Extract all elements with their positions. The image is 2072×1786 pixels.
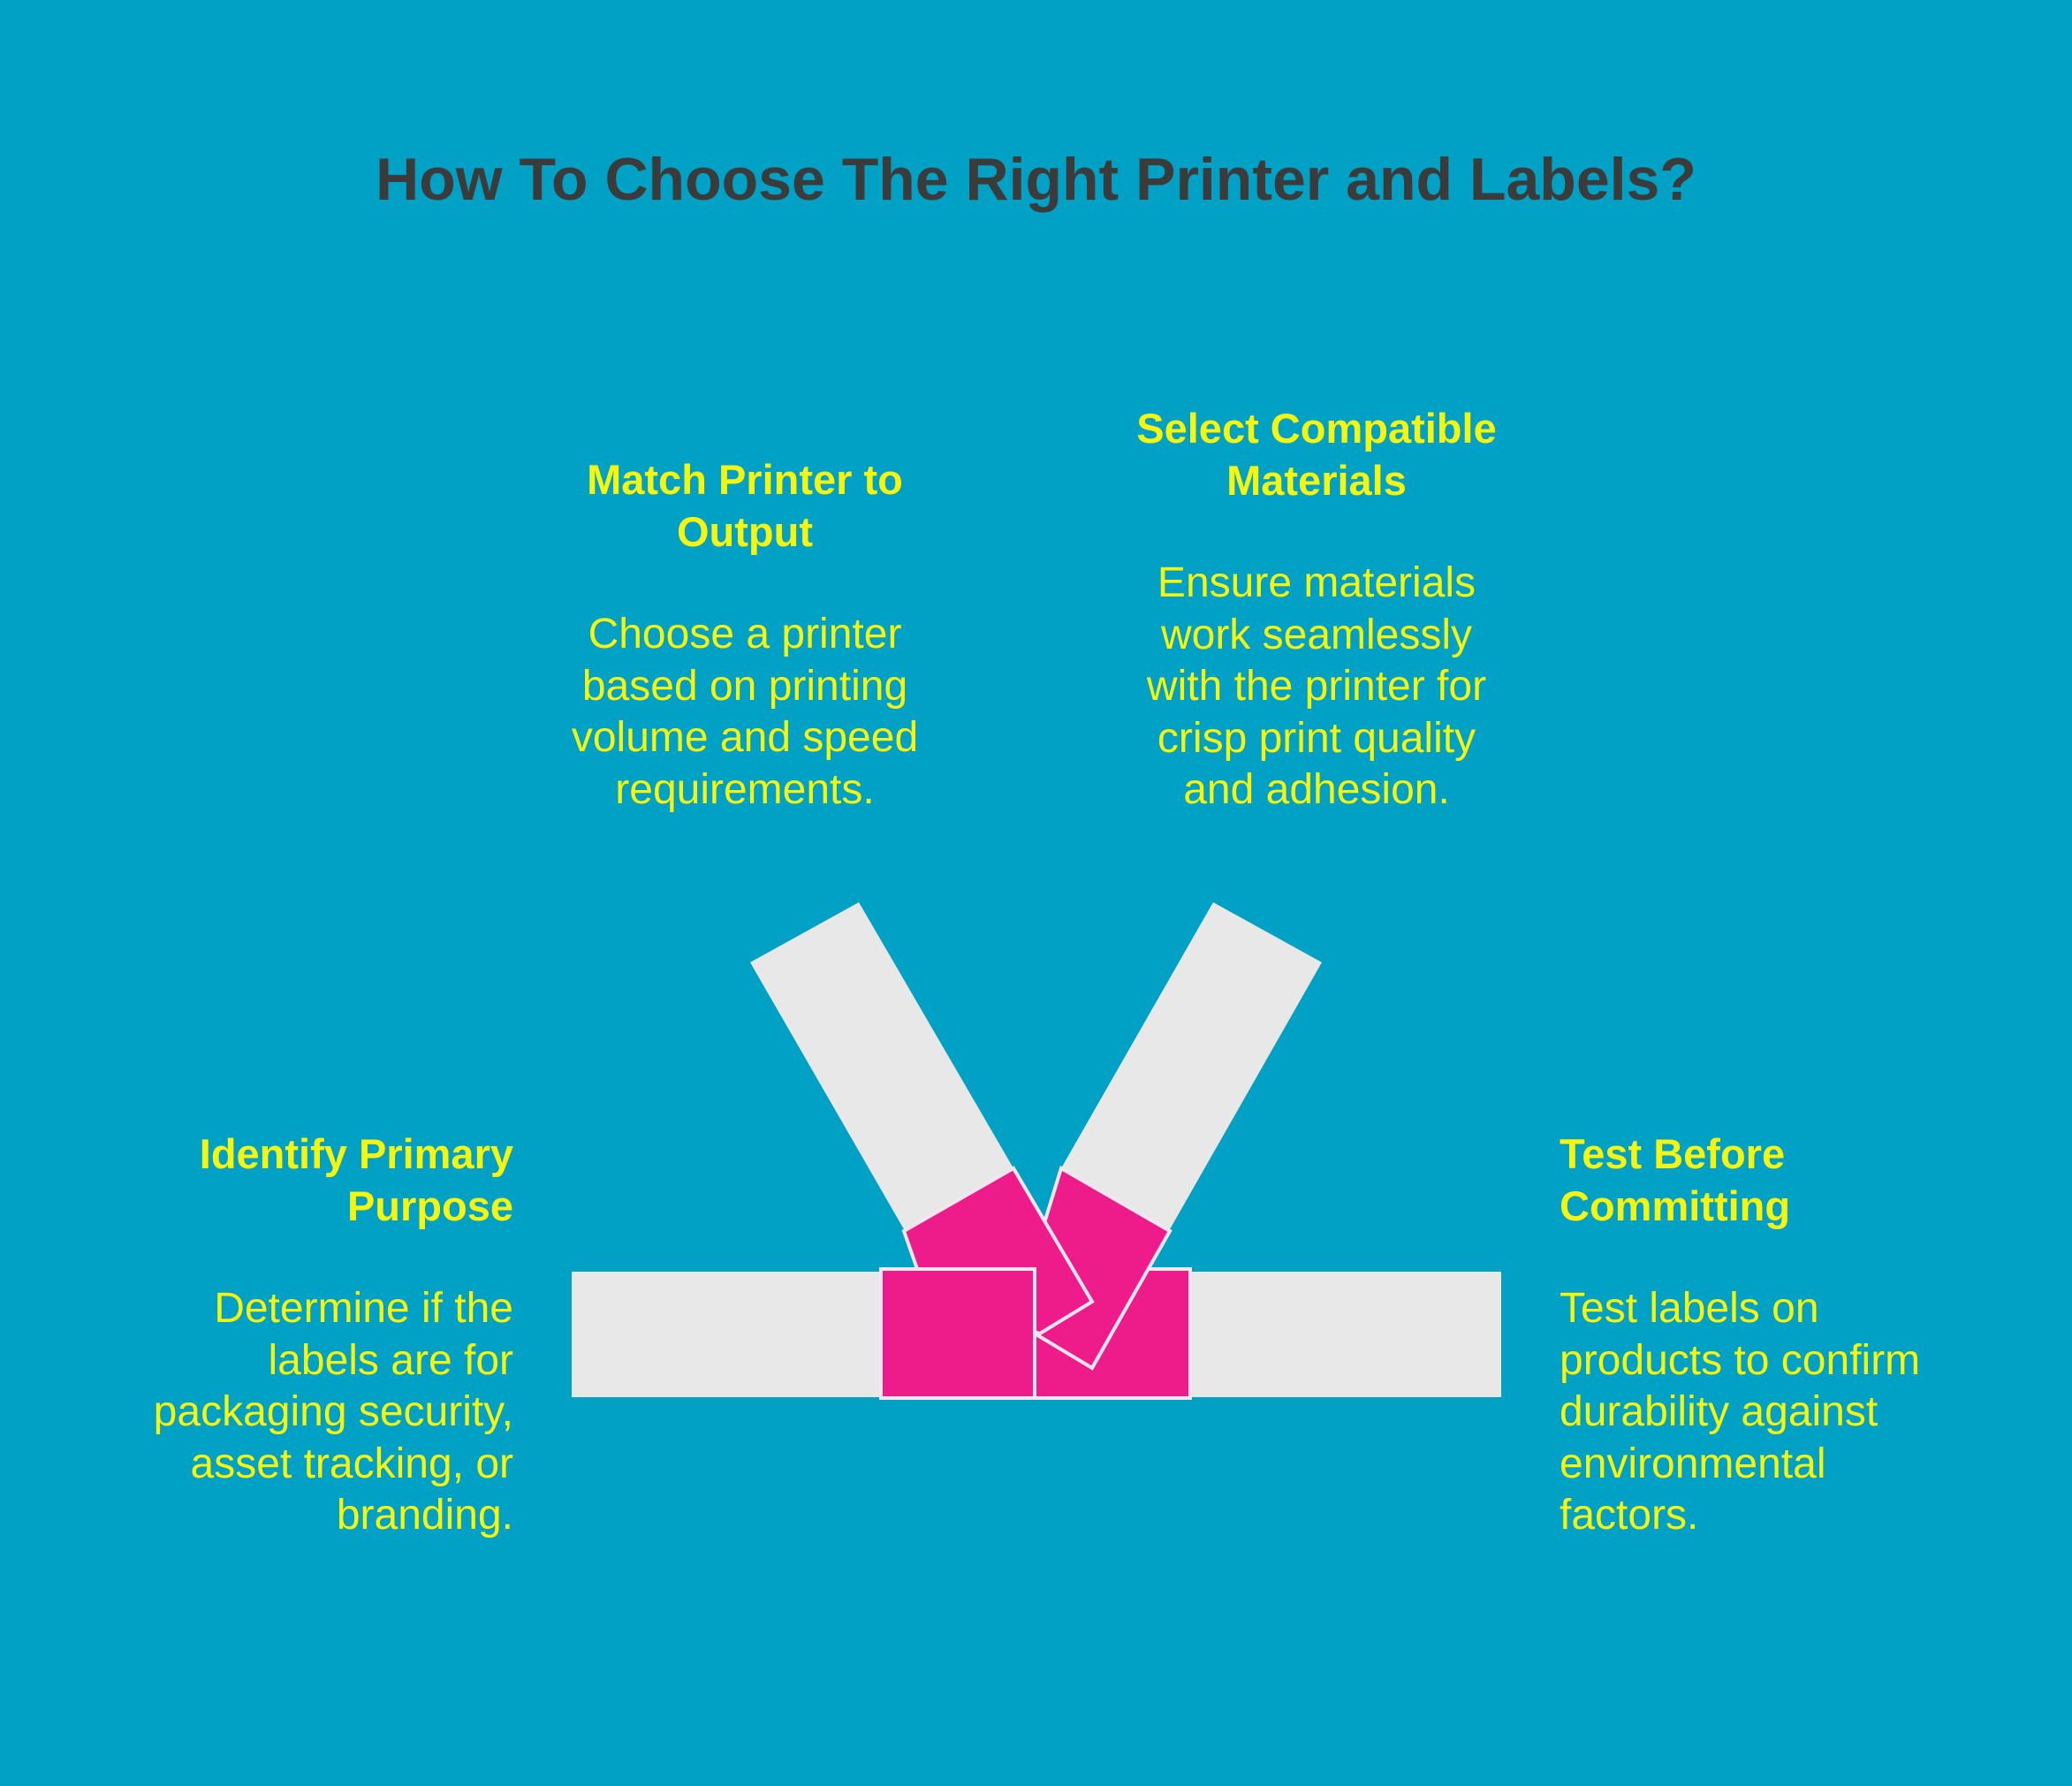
text block: match printer: Match Printer to (587, 456, 903, 503)
left pink diagonal (904, 1168, 1092, 1334)
text block: test before: Test labels on (1560, 1285, 1819, 1332)
text block: identify purpose: asset tracking, or (191, 1440, 513, 1486)
left bar (572, 1272, 881, 1397)
text block: match printer (572, 456, 918, 813)
text block: test before (1560, 1130, 1920, 1539)
right bar (1190, 1272, 1501, 1397)
text block: identify purpose: branding. (337, 1492, 513, 1539)
text block: select materials: Ensure materials (1157, 559, 1476, 606)
right pink diagonal (1035, 1168, 1170, 1368)
text block: select materials: crisp print quality (1157, 714, 1476, 762)
text block: select materials: and adhesion. (1183, 766, 1450, 813)
text block: identify purpose: Determine if the (214, 1285, 513, 1332)
text block: match printer: requirements. (615, 765, 875, 813)
text block: test before: factors. (1560, 1492, 1698, 1539)
text block: identify purpose (154, 1130, 513, 1539)
text block: identify purpose: Identify Primary (200, 1130, 513, 1177)
left diagonal bar (750, 902, 1013, 1229)
text block: match printer: Choose a printer (588, 611, 901, 657)
text block: match printer: Output (677, 507, 813, 555)
text block: select materials (1136, 405, 1497, 813)
text block: select materials: Select Compatible (1136, 405, 1497, 452)
text block: identify purpose: labels are for (269, 1336, 513, 1384)
right diagonal bar (1061, 902, 1322, 1229)
text block: test before: environmental (1560, 1440, 1825, 1486)
title: How To Choose The Right Printer and Labels? (376, 146, 1696, 213)
text block: match printer: based on printing (582, 663, 907, 709)
text block: test before: products to confirm (1560, 1336, 1920, 1384)
text block: select materials: Materials (1226, 456, 1407, 504)
text block: test before: durability against (1560, 1388, 1878, 1435)
text block: select materials: with the printer for (1147, 663, 1486, 710)
left pink square (881, 1269, 1035, 1398)
text block: test before: Test Before (1560, 1130, 1785, 1177)
text block: identify purpose: Purpose (347, 1182, 513, 1228)
right pink square (1035, 1269, 1190, 1398)
text block: test before: Committing (1560, 1182, 1790, 1228)
text block: match printer: volume and speed (572, 714, 918, 761)
text block: select materials: work seamlessly (1161, 612, 1472, 657)
text block: identify purpose: packaging security, (154, 1388, 513, 1435)
